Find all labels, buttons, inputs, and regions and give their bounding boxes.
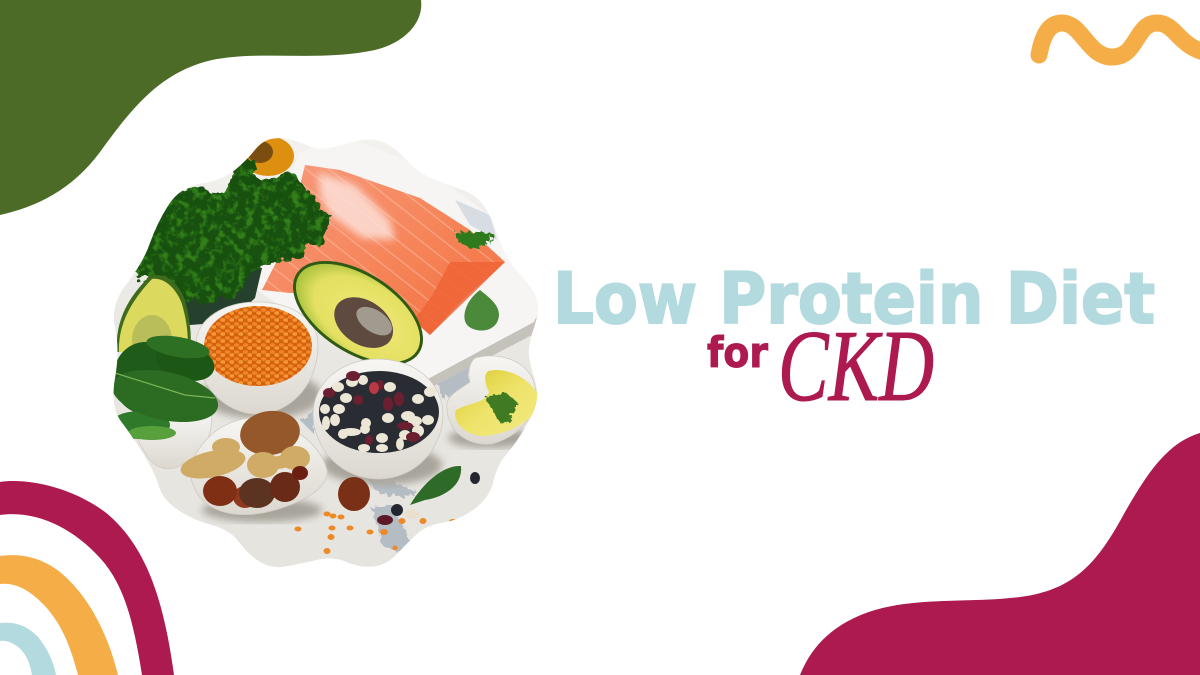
salmon fillet xyxy=(262,165,505,335)
herb in oil xyxy=(485,392,517,423)
beans bowl xyxy=(313,359,443,485)
herb sprig on salmon xyxy=(455,232,493,250)
loose hazelnut xyxy=(338,477,370,511)
spinach leaves xyxy=(114,336,218,440)
arc: light blue xyxy=(0,623,56,675)
walnut xyxy=(240,410,300,455)
cutting board xyxy=(257,199,538,386)
squiggle: orange top-right xyxy=(1039,23,1200,57)
peanuts xyxy=(180,438,310,478)
avocado pit xyxy=(334,297,394,348)
table surface xyxy=(100,130,550,575)
photo: protein foods in scalloped frame xyxy=(100,130,550,575)
oil dish xyxy=(447,356,540,448)
avocado half: large xyxy=(293,261,423,364)
small white bowl under spinach xyxy=(138,415,212,469)
arc: orange xyxy=(0,555,118,675)
blob: magenta bottom-right xyxy=(800,433,1200,675)
subtitle: CKD script: CKD xyxy=(778,310,934,423)
nut plate xyxy=(178,407,327,522)
gray worn patches xyxy=(300,366,470,552)
hazelnuts xyxy=(203,466,308,508)
rainbow: bottom-left arcs xyxy=(0,481,174,675)
spinach leaf on board xyxy=(464,290,499,331)
beans xyxy=(320,375,436,452)
amber jar xyxy=(242,136,294,176)
avocado half: left xyxy=(117,275,191,352)
parsley xyxy=(132,156,328,302)
loose beans and lentils xyxy=(294,472,480,554)
arc: magenta xyxy=(0,481,174,675)
blob: green top-left xyxy=(0,0,421,215)
subtitle: for: for xyxy=(707,328,768,377)
glass bowl xyxy=(185,268,262,325)
lentil bowl xyxy=(196,302,322,419)
title: Low Protein Diet: Low Protein Diet xyxy=(553,258,1155,340)
loose spinach leaf xyxy=(410,466,461,505)
